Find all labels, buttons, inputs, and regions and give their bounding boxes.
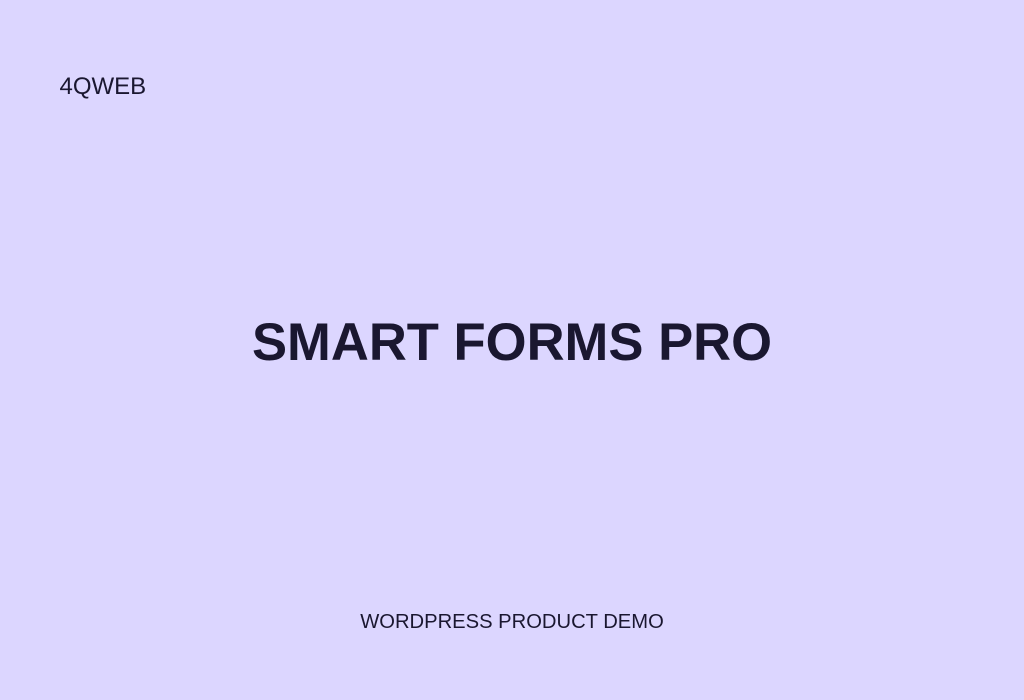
title: SMART FORMS PRO [252,313,772,372]
brand label: 4QWEB [60,73,146,100]
subtitle: WORDPRESS PRODUCT DEMO [360,611,664,633]
